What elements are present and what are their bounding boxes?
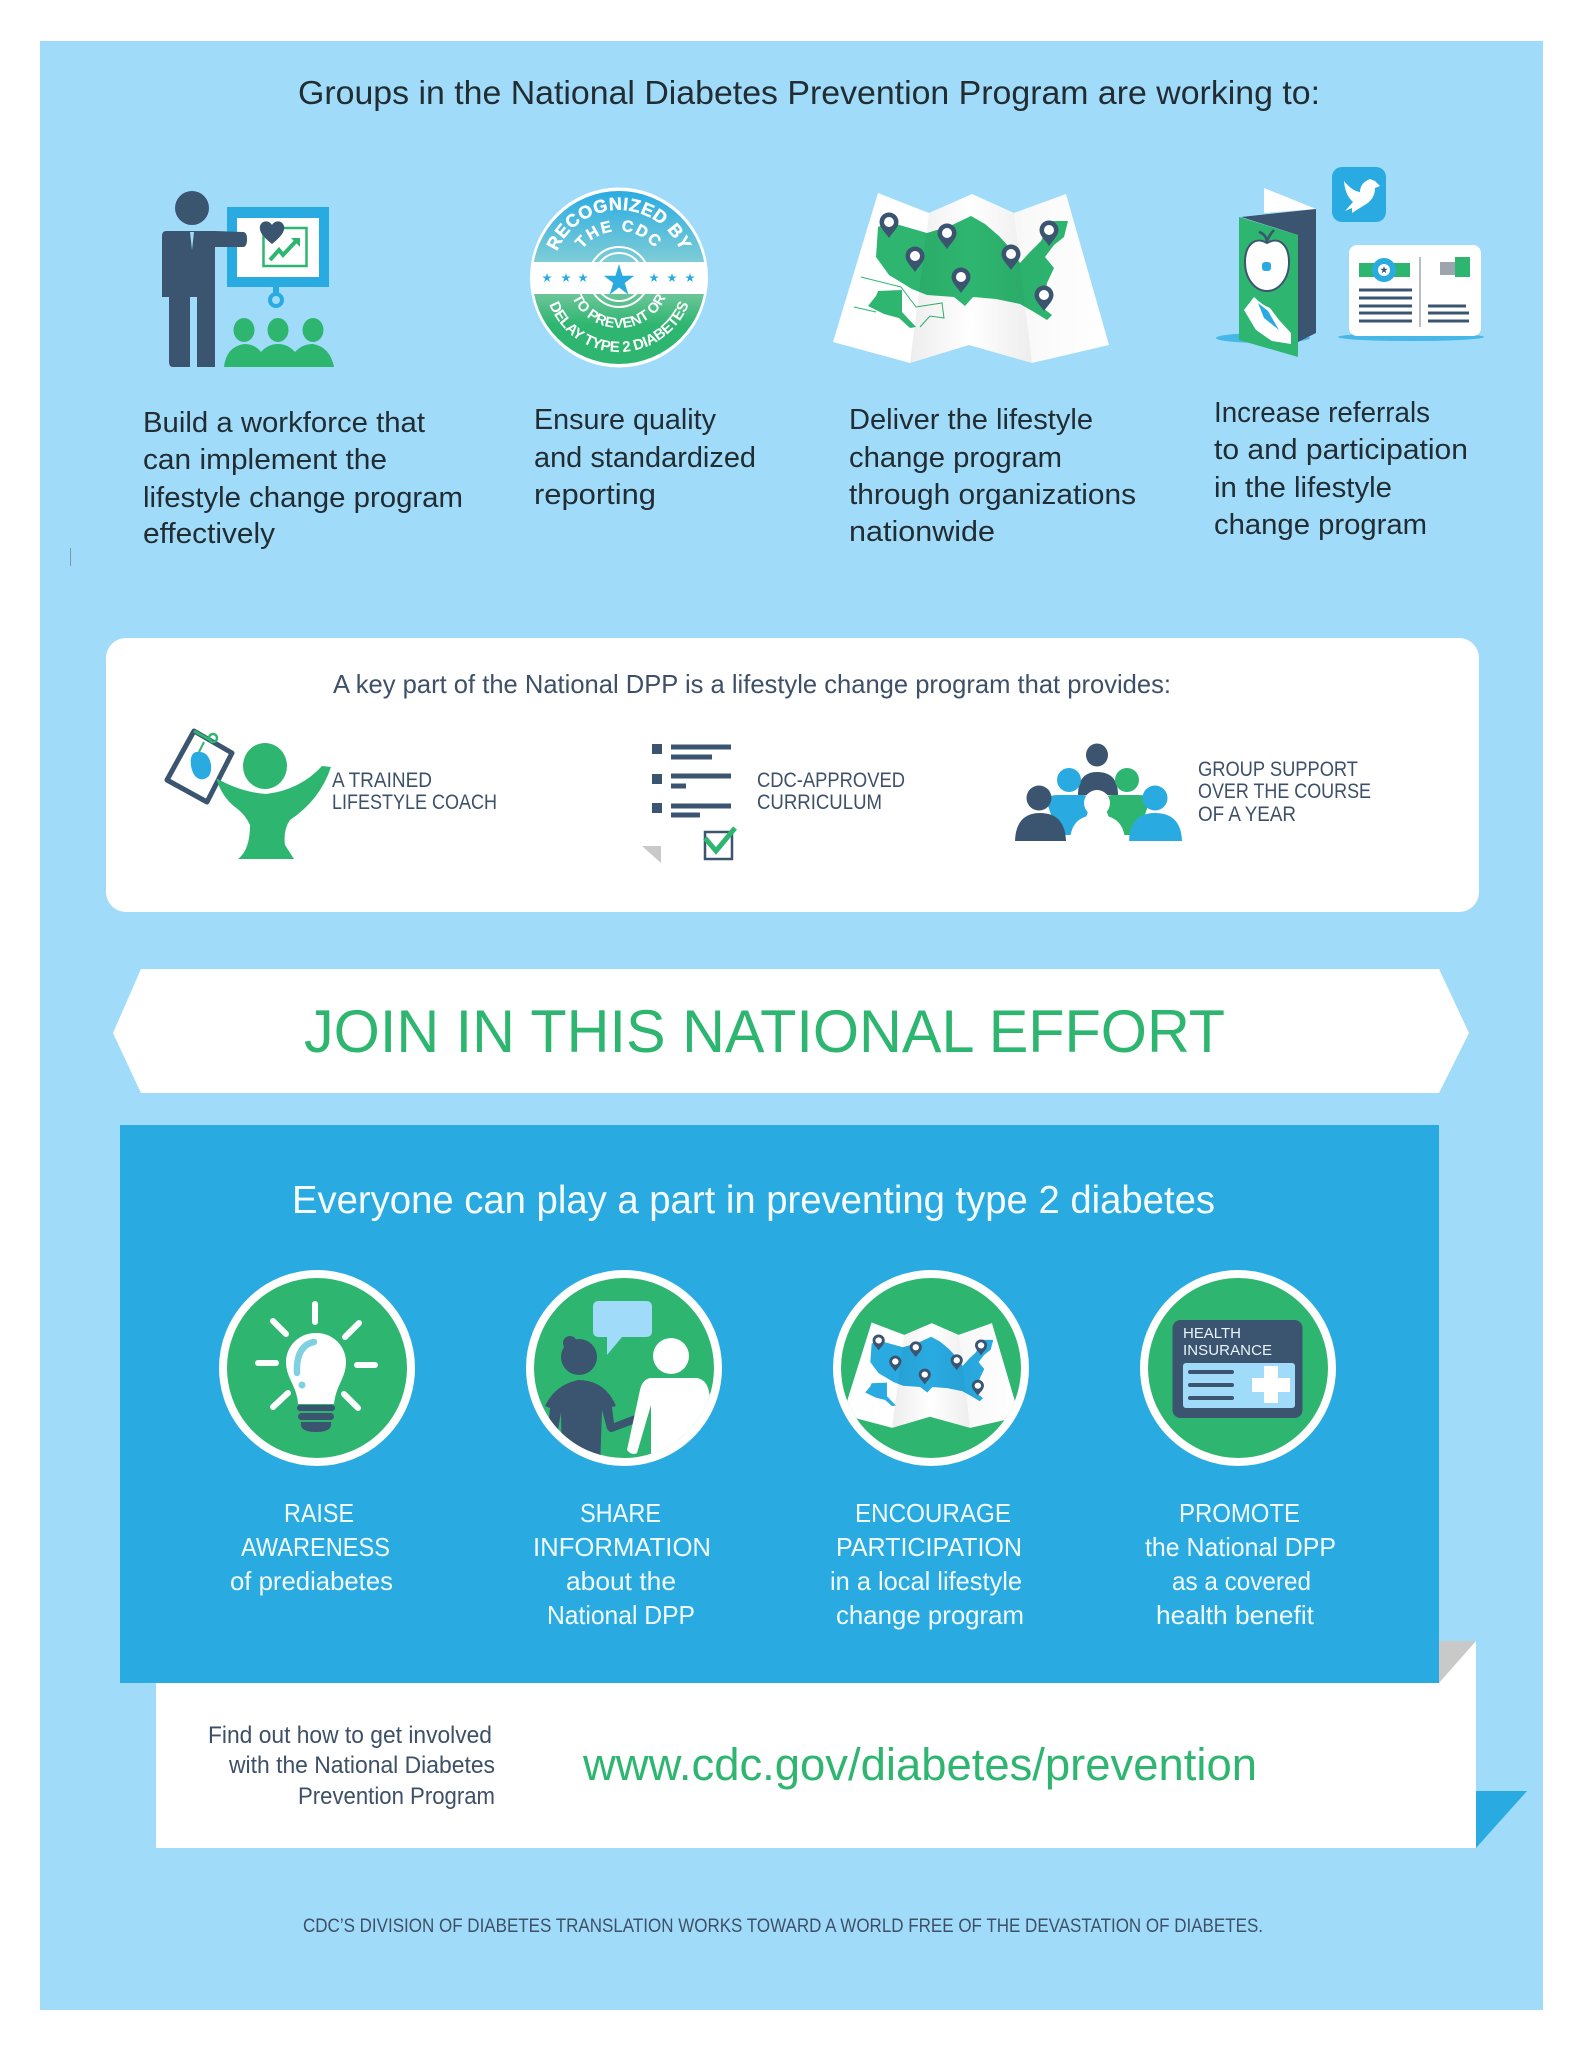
text: deliver the program (849, 404, 1136, 548)
label: group support (1198, 758, 1371, 826)
text: build a workforce: effectively (143, 518, 276, 550)
caption: share information: INFORMATION (533, 1532, 711, 1562)
stray tick mark (70, 548, 71, 566)
text: ensure quality: reporting (534, 479, 656, 511)
label: trained coach: LIFESTYLE COACH (332, 791, 497, 814)
caption: promote: the National DPP (1145, 1532, 1336, 1562)
text: increase referrals: in the lifestyle (1214, 472, 1392, 504)
text: build a workforce: lifestyle change program (143, 482, 463, 514)
caption: share information (533, 1498, 711, 1630)
text: increase referrals: Increase referrals (1214, 397, 1430, 429)
folded ribbon corner: blue (1476, 1791, 1527, 1848)
label: trained coach: A TRAINED (332, 769, 432, 792)
icon: group support (1015, 744, 1182, 841)
caption: raise awareness: RAISE (284, 1498, 354, 1528)
text: deliver the program: change program (849, 442, 1062, 474)
panel heading: A key part of the National DPP is a lifestyle change program that provides: (333, 669, 1171, 699)
caption: share information: National DPP (547, 1600, 695, 1630)
text: increase referrals (1214, 397, 1468, 541)
icon: recognized by the CDC badge: THE CDC (574, 220, 661, 247)
caption: encourage participation: ENCOURAGE (855, 1498, 1011, 1528)
icon: recognized by the CDC badge (530, 188, 708, 368)
icon: recognized by the CDC badge: TO PREVENT OR (574, 294, 666, 328)
panel: get involved strip (156, 1641, 1476, 1848)
icon: folded US map with pins (833, 193, 1109, 363)
banner: join in this national effort: JOIN IN THIS NATIONAL EFFORT (304, 998, 1225, 1065)
folded ribbon corner: grey (1439, 1641, 1476, 1683)
text: deliver the program: through organizations (849, 479, 1136, 511)
text: build a workforce: can implement the (143, 444, 387, 476)
caption: encourage participation: change program (836, 1600, 1024, 1630)
caption: encourage participation (830, 1498, 1024, 1630)
icon: health insurance card: INSURANCE (1183, 1342, 1272, 1359)
caption: share information: SHARE (580, 1498, 661, 1528)
footer statement: CDC’S DIVISION OF DIABETES TRANSLATION WORKS TOWARD A WORLD FREE OF THE DEVASTATION OF DIABETES. (303, 1916, 1263, 1937)
text: deliver the program: Deliver the lifestyle (849, 404, 1093, 436)
title: Groups in the National Diabetes Prevention Program are working to: (298, 74, 1320, 111)
icon: light bulb (223, 1274, 411, 1462)
icon: curriculum checklist (642, 744, 735, 863)
text: build a workforce (143, 407, 463, 550)
text: find out how: with the National Diabetes (228, 1752, 495, 1779)
caption: promote: PROMOTE (1179, 1498, 1300, 1528)
text: deliver the program: nationwide (849, 516, 995, 548)
panel heading: Everyone can play a part in preventing type 2 diabetes (292, 1179, 1215, 1222)
panel: lifestyle change program (106, 638, 1479, 912)
icon: presenter with audience (162, 191, 334, 367)
text: ensure quality (534, 404, 756, 511)
caption: raise awareness: AWARENESS (241, 1532, 390, 1562)
website url: www.cdc.gov/diabetes/prevention (582, 1739, 1257, 1790)
caption: raise awareness (230, 1498, 393, 1596)
icon: health insurance card (1144, 1274, 1332, 1462)
caption: promote (1145, 1498, 1336, 1630)
icon: lifestyle coach (167, 731, 331, 859)
text: ensure quality: Ensure quality (534, 404, 716, 436)
caption: promote: health benefit (1156, 1600, 1315, 1630)
text: increase referrals: change program (1214, 509, 1427, 541)
caption: encourage participation: in a local lifestyle (830, 1566, 1022, 1596)
label: curriculum: CDC-APPROVED (757, 769, 905, 792)
text: find out how (208, 1722, 495, 1810)
text: find out how: Prevention Program (298, 1783, 495, 1810)
icon: health insurance card: HEALTH (1183, 1325, 1241, 1342)
icon: recognized by the CDC badge: RECOGNIZED BY (546, 197, 692, 251)
label: group support: GROUP SUPPORT (1198, 758, 1358, 781)
caption: share information: about the (566, 1566, 676, 1596)
icon: recognized by the CDC badge: DELAY TYPE 2 DIABETES (550, 301, 688, 352)
label: curriculum (757, 769, 905, 814)
icon: two people talking (530, 1274, 725, 1470)
banner: join in this national effort (113, 969, 1469, 1093)
text: build a workforce: Build a workforce that (143, 407, 425, 439)
label: group support: OVER THE COURSE (1198, 780, 1371, 803)
panel: everyone can play a part (120, 1125, 1439, 1683)
label: group support: OF A YEAR (1198, 803, 1296, 826)
icon: brochure, twitter and postcard (1216, 167, 1484, 357)
caption: raise awareness: of prediabetes (230, 1566, 393, 1596)
label: curriculum: CURRICULUM (757, 791, 882, 814)
icon: map in circle (837, 1274, 1025, 1462)
caption: encourage participation: PARTICIPATION (836, 1532, 1022, 1562)
text: increase referrals: to and participation (1214, 434, 1468, 466)
label: trained coach (332, 769, 497, 814)
text: find out how: Find out how to get involved (208, 1722, 492, 1749)
text: ensure quality: and standardized (534, 442, 756, 474)
caption: promote: as a covered (1172, 1566, 1311, 1596)
